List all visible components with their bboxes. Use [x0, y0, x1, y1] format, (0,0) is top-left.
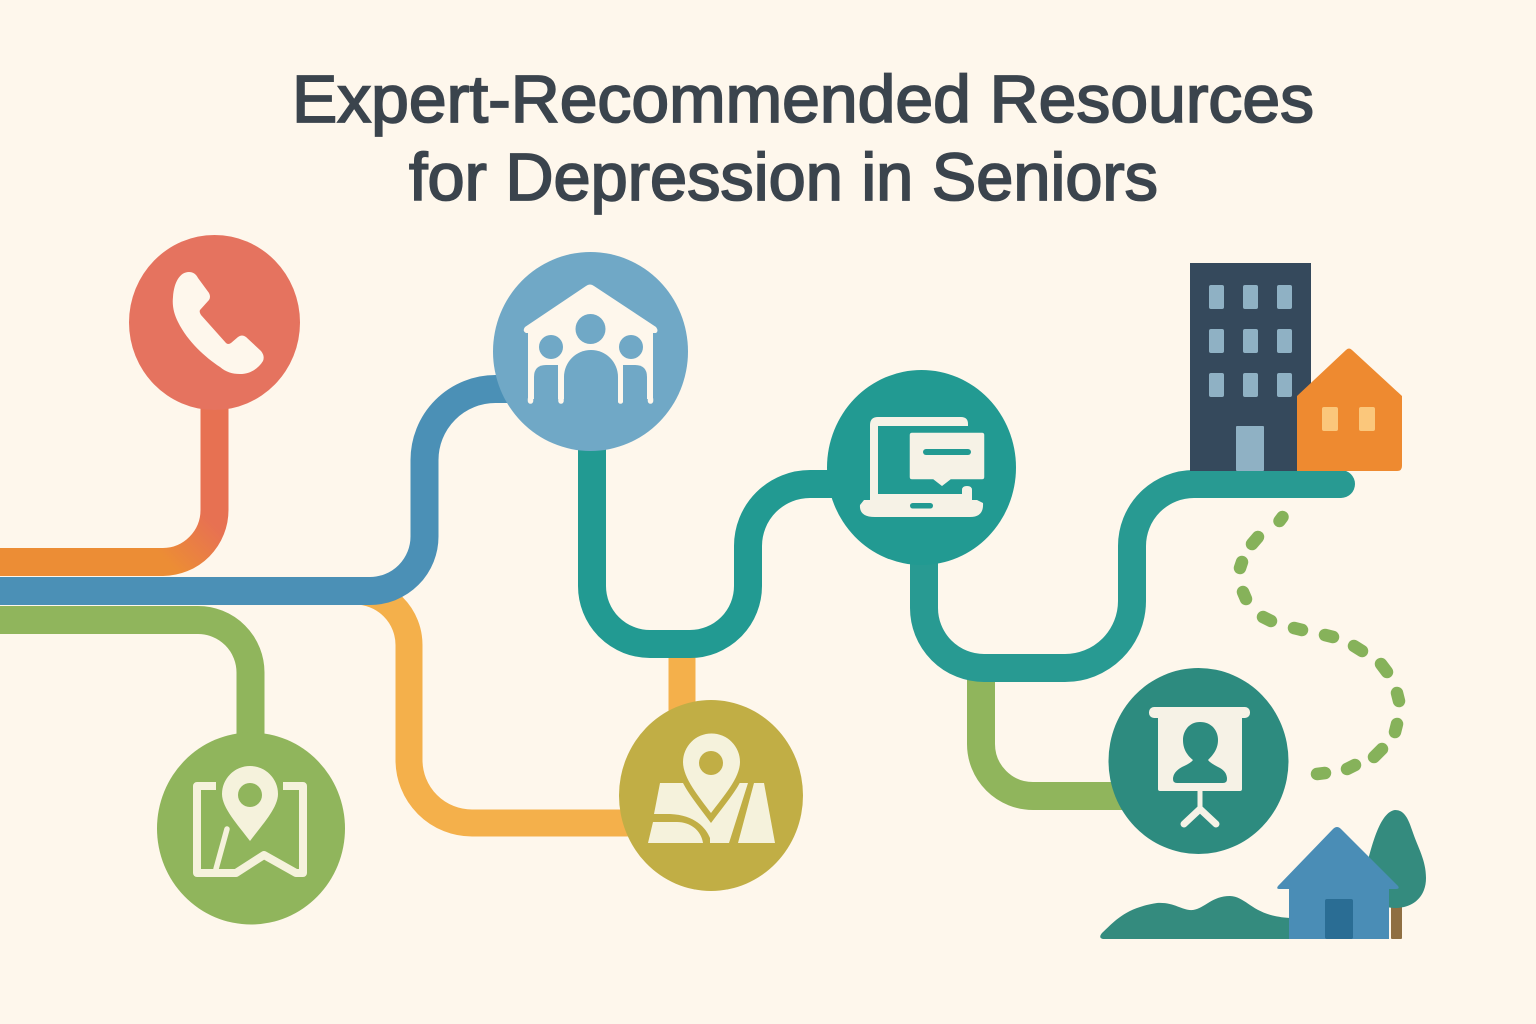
title: Expert-Recommended Resources [292, 62, 1314, 137]
icon: landscape with home and tree [1100, 810, 1426, 939]
icon: presentation [1108, 668, 1288, 854]
route: blue main [0, 389, 510, 591]
icon: road map pin, olive [619, 700, 803, 891]
icon: phone [129, 235, 300, 410]
route: orange to phone [0, 400, 214, 562]
icon: community house [493, 252, 688, 451]
route: green to map [0, 620, 250, 745]
title [292, 62, 1314, 215]
route: teal right [924, 484, 1341, 668]
route: yellow connector [668, 650, 696, 715]
title: for Depression in Seniors [409, 140, 1158, 215]
icon: office building [1190, 263, 1311, 471]
route: yellow to location [355, 591, 640, 823]
icon: map with pin, green [157, 732, 345, 924]
route: teal center [592, 440, 840, 644]
icon: laptop chat [827, 370, 1016, 565]
dotted trail [1240, 517, 1399, 774]
icon: orange house [1297, 348, 1402, 471]
route: green to presentation [981, 670, 1125, 796]
